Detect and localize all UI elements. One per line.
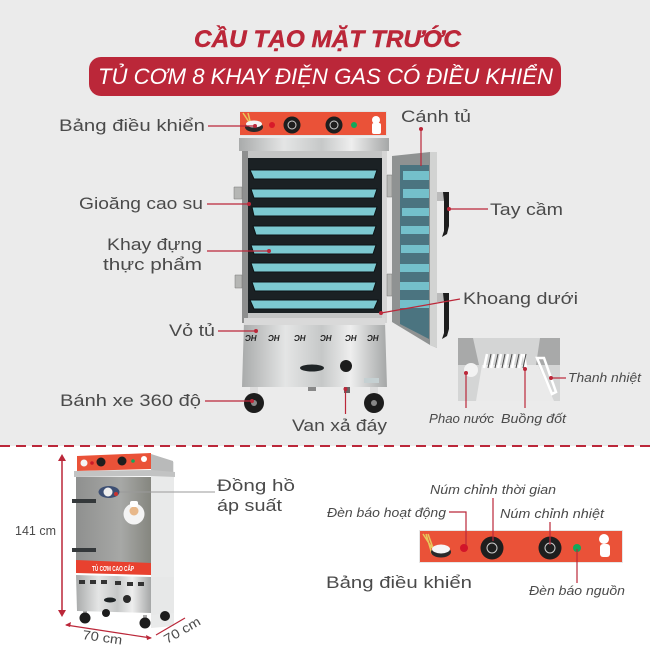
label: Khoang dưới: Khoang dưới <box>463 289 578 308</box>
label: Tay cầm <box>447 200 563 219</box>
top control strip <box>77 453 151 471</box>
closed door handles <box>72 499 96 552</box>
label: Buồng đốt: Buồng đốt <box>501 411 568 426</box>
lower base: ƆH <box>367 334 379 343</box>
cabinet body <box>242 151 387 323</box>
label: Van xả đáy: Van xả đáy <box>292 416 388 435</box>
label: Gioăng cao su <box>79 194 251 213</box>
label: Đèn báo hoạt động <box>327 505 466 545</box>
dimension: width 70 cm <box>65 622 152 648</box>
label: Núm chỉnh nhiệt <box>500 506 606 545</box>
hinges <box>234 175 392 296</box>
base <box>76 575 174 615</box>
subtitle banner: TỦ CƠM 8 KHAY ĐIỆN GAS CÓ ĐIỀU KHIỂN <box>98 63 553 89</box>
title: CẦU TẠO MẶT TRƯỚC <box>194 25 462 53</box>
label: Thanh nhiệt: Thanh nhiệt <box>568 370 642 385</box>
pressure gauge <box>98 486 120 498</box>
subtitle banner <box>89 57 561 96</box>
closed cabinet illustration <box>72 453 175 628</box>
lower base <box>242 318 387 387</box>
label: Núm chỉnh nhiệt: Núm chỉnh nhiệt <box>500 506 606 521</box>
label: Đồng hồ áp suất <box>120 476 295 515</box>
label: Bánh xe 360 độ: Bánh xe 360 độ <box>60 391 201 410</box>
label: Phao nước: Phao nước <box>429 411 494 426</box>
top rim <box>239 138 389 151</box>
wheels <box>244 387 384 413</box>
red banner <box>76 560 151 575</box>
interior <box>248 158 382 313</box>
label: Cánh tủ <box>401 107 471 166</box>
rim <box>74 470 175 477</box>
label: Phao nước <box>429 371 494 426</box>
heading: Bảng điều khiển: Bảng điều khiển <box>326 573 472 592</box>
lower base: ƆH <box>294 334 306 343</box>
dimension: height 141 cm: 141 cm <box>15 523 56 538</box>
closed cabinet wheels <box>80 609 170 628</box>
label: Bảng điều khiển <box>59 116 257 135</box>
inset: interior burner <box>458 338 560 401</box>
label: Tay cầm: Tay cầm <box>490 200 563 219</box>
label: Khay đựng thực phẩm <box>103 235 271 274</box>
dimension: height 141 cm <box>15 454 66 617</box>
label: Đèn báo nguồn: Đèn báo nguồn <box>529 583 625 598</box>
label: Đèn báo hoạt động: Đèn báo hoạt động <box>327 505 447 520</box>
control panel on cabinet <box>240 111 387 136</box>
label: Núm chỉnh thời gian <box>430 482 556 541</box>
open door <box>392 152 437 348</box>
label: Cánh tủ: Cánh tủ <box>401 107 471 126</box>
label: Đồng hồ áp suất: áp suất <box>217 496 282 515</box>
label: Khay đựng thực phẩm: thực phẩm <box>103 255 202 274</box>
food trays <box>250 170 378 309</box>
control panel detail <box>419 530 623 563</box>
label: Khay đựng thực phẩm: Khay đựng <box>107 235 202 254</box>
background top section <box>0 0 650 446</box>
label: Khoang dưới <box>379 289 578 315</box>
lower base: ƆH <box>268 334 280 343</box>
label: Van xả đáy <box>292 387 388 435</box>
lower base: ƆH <box>320 334 332 343</box>
dimension: width 70 cm: 70 cm <box>82 627 123 648</box>
label: Đèn báo nguồn <box>529 549 625 598</box>
label: Buồng đốt <box>501 367 568 426</box>
label: Bảng điều khiển: Bảng điều khiển <box>59 116 205 135</box>
label: Gioăng cao su: Gioăng cao su <box>79 194 203 213</box>
door <box>76 477 151 564</box>
door handles <box>437 192 449 339</box>
dimension: depth 70 cm: 70 cm <box>161 614 203 647</box>
label: Đồng hồ áp suất: Đồng hồ <box>217 476 295 495</box>
main cabinet illustration <box>234 111 449 413</box>
label: Vỏ tủ <box>169 321 258 340</box>
lower base: ƆH <box>245 334 257 343</box>
label: Núm chỉnh thời gian: Núm chỉnh thời gian <box>430 482 556 497</box>
chef sticker <box>124 501 144 524</box>
lower base: ƆH <box>345 334 357 343</box>
label: Bánh xe 360 độ <box>60 391 254 410</box>
red banner: TỦ CƠM CAO CẤP <box>92 563 134 573</box>
label: Vỏ tủ: Vỏ tủ <box>169 321 215 340</box>
side panel <box>151 454 174 628</box>
